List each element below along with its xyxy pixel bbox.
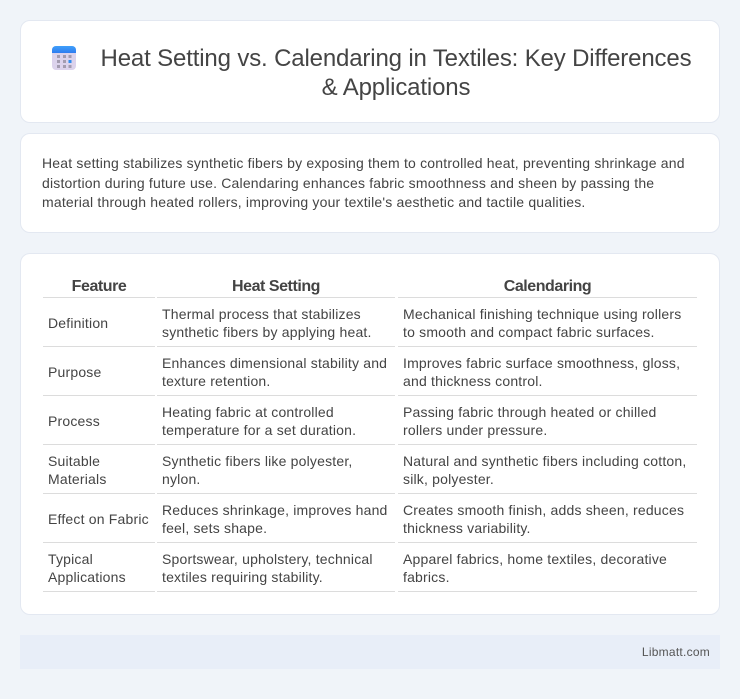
row: process: Passing fabric through heated or chilled [403,404,657,420]
row: typical applications: Apparel fabrics, home textiles, decorative [403,551,667,567]
row: purpose: texture retention. [162,373,270,389]
row: suitable materials: Synthetic fibers like polyester, [162,453,352,469]
title: Heat Setting vs. Calendaring in Textiles: Key Differences [101,45,691,72]
row: typical applications [48,551,667,585]
row: process [48,404,657,438]
row: purpose [48,355,680,389]
row: suitable materials: silk, polyester. [403,471,494,487]
row: suitable materials: nylon. [162,471,200,487]
row: process: Process [48,413,100,429]
footer credit: Libmatt.com [642,645,710,659]
row: definition: synthetic fibers by applying heat. [162,324,372,340]
row: effect on fabric: thickness variability. [403,520,531,536]
row: purpose: Enhances dimensional stability and [162,355,387,371]
row: definition: Thermal process that stabilizes [162,306,361,322]
title [101,45,691,101]
row: effect on fabric [48,502,684,536]
icon: calendar [52,46,76,70]
row: purpose: Improves fabric surface smoothness, gloss, [403,355,680,371]
table header [72,278,591,295]
row: definition [48,306,681,340]
row: typical applications: fabrics. [403,569,450,585]
table header: Calendaring [504,278,591,295]
row: suitable materials: Materials [48,471,107,487]
row: effect on fabric: Effect on Fabric [48,511,149,527]
panel: comparison table [20,253,720,615]
row: typical applications: Typical [48,551,93,567]
table header: Feature [72,278,126,295]
row: process: rollers under pressure. [403,422,547,438]
intro paragraph: distortion during future use. Calendaring enhances fabric smoothness and sheen by passing the [42,175,654,191]
row: effect on fabric: feel, sets shape. [162,520,267,536]
panel: intro text [20,133,720,233]
row: suitable materials: Suitable [48,453,100,469]
row: suitable materials: Natural and synthetic fibers including cotton, [403,453,686,469]
row: definition: Mechanical finishing technique using rollers [403,306,681,322]
row: typical applications: Applications [48,569,126,585]
footer bar [20,635,720,669]
row: definition: Definition [48,315,108,331]
intro paragraph [42,155,685,210]
row: process: temperature for a set duration. [162,422,356,438]
row: typical applications: textiles requiring stability. [162,569,323,585]
intro paragraph: material through heated rollers, improving your textile's aesthetic and tactile qualities. [42,194,586,210]
row: purpose: Purpose [48,364,101,380]
row: typical applications: Sportswear, upholstery, technical [162,551,373,567]
row: definition: to smooth and compact fabric surfaces. [403,324,655,340]
row: effect on fabric: Creates smooth finish, adds sheen, reduces [403,502,684,518]
comparison table [43,278,697,592]
panel: title card [20,20,720,123]
row: process: Heating fabric at controlled [162,404,334,420]
row: suitable materials [48,453,686,487]
row: effect on fabric: Reduces shrinkage, improves hand [162,502,388,518]
title: & Applications [322,74,470,101]
table header: Heat Setting [232,278,320,295]
intro paragraph: Heat setting stabilizes synthetic fibers by exposing them to controlled heat, preventing shrinkage and [42,155,685,171]
row: purpose: and thickness control. [403,373,543,389]
